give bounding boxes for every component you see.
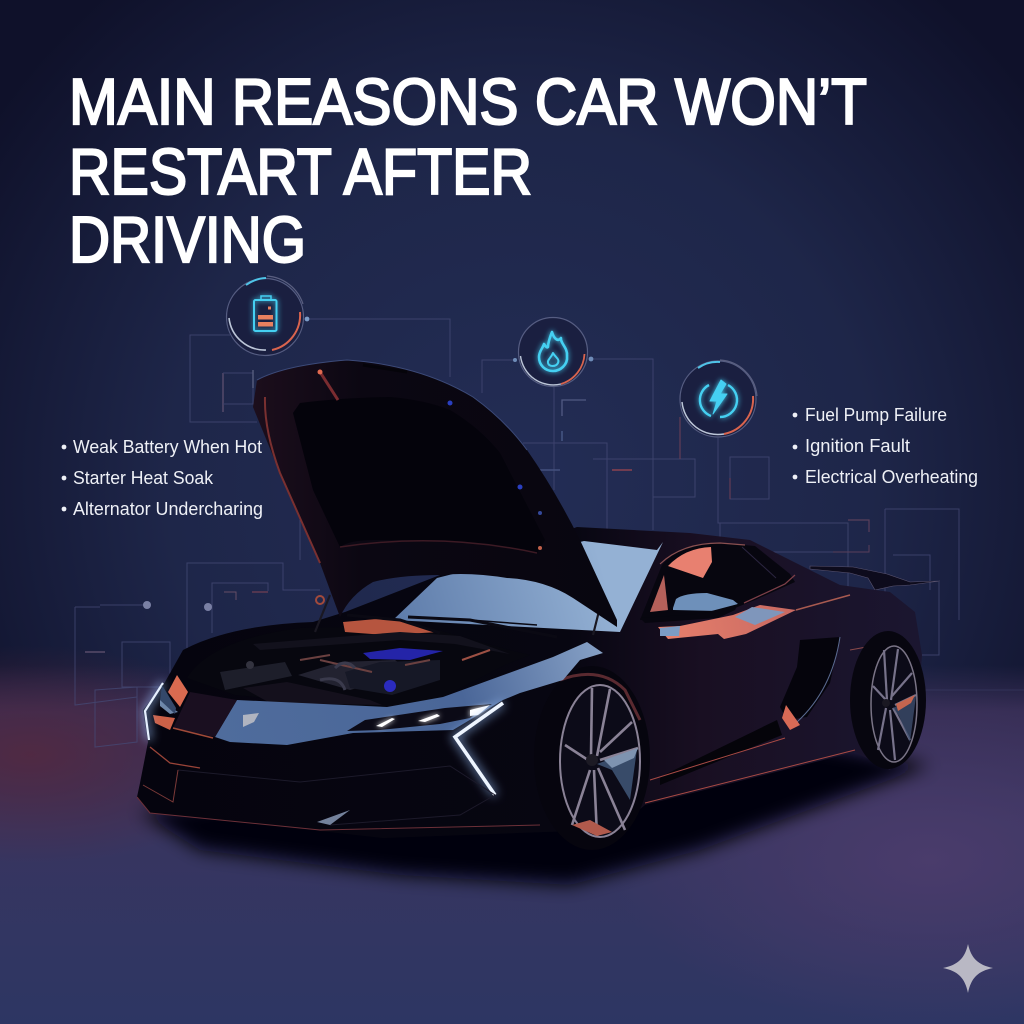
rear wheel	[850, 631, 926, 769]
title: RESTART AFTER	[69, 135, 532, 208]
title	[69, 65, 867, 276]
circuit lines	[75, 319, 1024, 747]
wipers	[347, 615, 557, 637]
LED light right core	[455, 703, 503, 795]
open hood	[253, 360, 617, 627]
headlight	[347, 704, 492, 731]
hood inner panel	[293, 397, 545, 553]
right list	[793, 404, 978, 487]
blue front hood panel	[215, 642, 603, 745]
car	[137, 360, 940, 850]
title: MAIN REASONS CAR WON’T	[69, 65, 867, 138]
front wheel	[534, 666, 650, 850]
door reflection	[658, 605, 796, 639]
badge	[243, 713, 259, 727]
side air vent	[780, 637, 840, 730]
left list	[62, 436, 263, 519]
title: DRIVING	[69, 203, 306, 276]
hood struts	[315, 595, 600, 635]
left list: Alternator Undercharing	[73, 498, 263, 519]
LED light left core	[145, 683, 163, 740]
windshield	[393, 541, 663, 632]
left lamp	[160, 685, 176, 714]
sill lines	[645, 646, 872, 803]
upper bumper band	[173, 692, 237, 737]
left list: Starter Heat Soak	[73, 467, 214, 488]
strut ring	[316, 596, 324, 604]
right list: Ignition Fault	[805, 435, 910, 456]
LED light right	[455, 703, 503, 795]
icon: flame	[518, 318, 588, 386]
LED light left	[145, 683, 163, 740]
bumper lines	[137, 728, 540, 830]
right list: Electrical Overheating	[805, 466, 978, 487]
icon: lightning bolt	[680, 360, 757, 437]
lower side shadow	[660, 720, 782, 785]
engine bay	[187, 618, 530, 708]
ground shadow	[140, 740, 930, 885]
sparkle watermark	[943, 944, 993, 993]
left list: Weak Battery When Hot	[73, 436, 262, 457]
door mirror	[640, 593, 738, 623]
hood edge reflection	[265, 397, 320, 563]
circuit nodes	[143, 317, 593, 611]
front corner reflections	[153, 675, 188, 730]
icon: battery	[226, 276, 304, 356]
car body	[137, 527, 922, 838]
spoiler	[810, 566, 940, 590]
roofline highlight	[796, 595, 850, 610]
right list: Fuel Pump Failure	[805, 404, 947, 425]
hood outer	[253, 360, 617, 627]
side windows	[640, 543, 795, 620]
